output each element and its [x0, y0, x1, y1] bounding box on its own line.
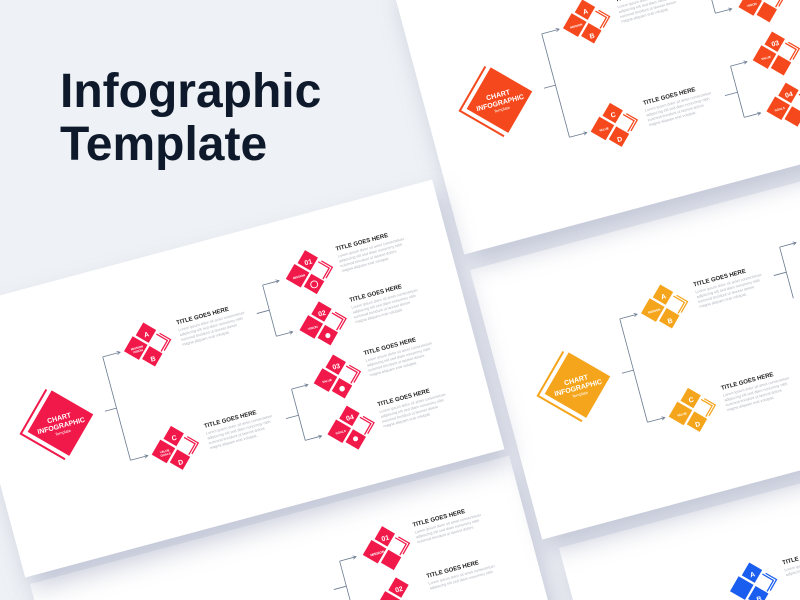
slide: main red: magna aliquam erat volutpat.: [182, 330, 230, 347]
cluster 01: MISSION: [292, 273, 306, 280]
slide: orange: Lorem ipsum dolor sit amet consectetuer: [645, 91, 713, 113]
slide: yellow: D: [695, 421, 701, 429]
slide: blue: A: [749, 571, 756, 579]
cluster 03: VALUE: [322, 378, 332, 384]
slide: orange: D: [617, 136, 623, 144]
cluster 01: 01: [381, 535, 390, 543]
slide: orange: euismod tincidunt ut laoreet dolore: [620, 0, 677, 19]
slide: main red: adipiscing elit sed diam nonummy nibh: [352, 294, 416, 315]
slide: orange: euismod tincidunt ut laoreet dolore: [647, 103, 704, 122]
cluster CD: D: [178, 459, 184, 467]
slide: yellow: euismod tincidunt ut laoreet dolore: [725, 388, 782, 407]
slide: yellow: B: [667, 318, 674, 326]
slide: main red: euismod tincidunt ut laoreet dolore: [354, 301, 411, 319]
slide: main red: euismod tincidunt ut laoreet dolore: [368, 354, 425, 373]
cluster AB: VISION: [132, 348, 143, 354]
cluster AB: B: [150, 356, 157, 364]
slide: bottom red: euismod tincidunt ut laoreet dolore: [417, 525, 474, 544]
slide: main red: euismod tincidunt ut laoreet dolore: [181, 323, 238, 342]
slide: main red: adipiscing elit sed diam nonummy nibh: [207, 420, 271, 441]
cluster 04: [321, 398, 381, 458]
slide: orange: Template: [493, 105, 511, 114]
chart diamond: CHART: [564, 374, 590, 387]
slide: orange: 03: [771, 40, 780, 49]
cluster 01: 01: [304, 259, 313, 267]
slide: bottom red: TITLE GOES HERE: [412, 509, 466, 529]
slide: orange: [392, 0, 800, 254]
slide: bottom red: Lorem ipsum dolor sit amet consectetuer: [414, 513, 482, 535]
slide: main red: TITLE GOES HERE: [176, 307, 230, 327]
slide: bottom red: [30, 456, 581, 600]
slide: main red: Lorem ipsum dolor sit amet consectetuer: [379, 392, 447, 414]
slide: orange: C: [610, 112, 617, 120]
cluster 03: 03: [332, 363, 341, 372]
slide: orange: VISION: [746, 2, 757, 8]
slide: main red: adipiscing elit sed diam nonummy nibh: [339, 243, 403, 263]
slide: yellow: magna aliquam erat volutpat.: [727, 396, 775, 412]
slide: orange: magna aliquam erat volutpat.: [649, 111, 697, 127]
slide: yellow: [470, 142, 800, 539]
slide: yellow: TITLE GOES HERE: [721, 372, 774, 392]
slide: main red: adipiscing elit sed diam nonummy nibh: [380, 398, 444, 419]
slide: orange: B: [589, 33, 596, 41]
slide: main red: magna aliquam erat volutpat.: [210, 434, 258, 450]
cluster 02: 02: [395, 586, 404, 594]
slide: main red: Lorem ipsum dolor sit amet consectetuer: [351, 288, 419, 310]
slide: main red: Lorem ipsum dolor sit amet consectetuer: [365, 341, 433, 363]
slide: orange: VALUE: [761, 55, 771, 61]
cluster 04: 04: [346, 414, 355, 423]
slide: main red: TITLE GOES HERE: [204, 410, 257, 430]
slide: yellow: euismod tincidunt ut laoreet dolore: [698, 285, 755, 304]
cluster 04: GOALS: [335, 429, 346, 435]
slide: yellow: adipiscing elit sed diam nonummy nibh: [724, 382, 788, 403]
slide: main red: magna aliquam erat volutpat.: [383, 412, 431, 429]
chart diamond: [528, 340, 620, 432]
chart diamond: CHART: [47, 412, 73, 425]
slide: orange: TITLE GOES HERE: [643, 87, 696, 107]
slide: orange: CHART: [486, 89, 512, 102]
slide: orange: GOALS: [774, 106, 785, 112]
slide: main red: euismod tincidunt ut laoreet dolore: [208, 426, 265, 445]
cluster 01: MISSION: [370, 550, 385, 557]
cluster CD: [145, 418, 205, 478]
slide: main red: [0, 180, 504, 577]
slide: main red: magna aliquam erat volutpat.: [369, 361, 417, 377]
slide: main red: euismod tincidunt ut laoreet dolore: [340, 249, 397, 268]
chart diamond: INFOGRAPHIC: [37, 417, 86, 436]
slide: main red: TITLE GOES HERE: [349, 284, 403, 304]
title: Infographic: [60, 65, 321, 118]
cluster 03: [307, 347, 367, 407]
slide: yellow: MISSION: [648, 307, 661, 315]
slide: orange: A: [582, 8, 589, 16]
slide: main red: euismod tincidunt ut laoreet dolore: [382, 405, 439, 424]
slide: main red: Lorem ipsum dolor sit amet consectetuer: [178, 311, 246, 332]
slide: main red: TITLE GOES HERE: [377, 389, 431, 408]
slide: main red: Lorem ipsum dolor sit amet consectetuer: [337, 237, 405, 259]
slide: orange: VALUE: [599, 126, 609, 133]
title: Template: [60, 118, 267, 171]
cluster AB: MISSION: [130, 344, 144, 351]
slide: orange: INFOGRAPHIC: [476, 94, 525, 113]
slide: orange: MISSION: [570, 22, 583, 30]
slide: main red: Lorem ipsum dolor sit amet consectetuer: [206, 414, 274, 436]
slide: yellow: adipiscing elit sed diam nonummy nibh: [696, 278, 760, 299]
slide: yellow: A: [660, 293, 667, 301]
cluster 02: [370, 570, 430, 600]
slide: main red: magna aliquam erat volutpat.: [355, 308, 403, 324]
slide: orange: magna aliquam erat volutpat.: [621, 7, 669, 24]
brackets: [84, 280, 322, 488]
cluster 01: [279, 243, 339, 302]
cluster CD: GOALS: [160, 451, 171, 458]
slide: yellow: magna aliquam erat volutpat.: [699, 292, 747, 309]
cluster CD: C: [171, 435, 178, 443]
slide: yellow: C: [688, 397, 695, 405]
slide: bottom red: adipiscing elit sed diam nonummy nibh: [416, 519, 480, 539]
slide: yellow: Lorem ipsum dolor sit amet consectetuer: [695, 273, 763, 294]
slide: blue: [559, 420, 800, 600]
cluster AB: A: [143, 331, 150, 339]
slide: main red: adipiscing elit sed diam nonummy nibh: [179, 316, 243, 337]
slide: yellow: Lorem ipsum dolor sit amet consectetuer: [723, 376, 791, 398]
cluster 02: [293, 294, 353, 354]
slide: orange: 04: [785, 91, 794, 100]
slide: yellow: VALUE: [677, 411, 687, 418]
slide: main red: magna aliquam erat volutpat.: [341, 257, 390, 273]
cluster AB: [118, 315, 177, 375]
cluster CD: VALUE: [159, 448, 170, 454]
cluster 02: VISION: [307, 325, 318, 331]
slide: bottom red: adipiscing elit sed diam nonummy nibh: [429, 570, 493, 591]
slide: orange: adipiscing elit sed diam nonummy nibh: [646, 97, 710, 118]
slide: bottom red: Lorem ipsum dolor sit amet consectetuer: [428, 564, 496, 586]
slide: yellow: TITLE GOES HERE: [693, 269, 747, 289]
chart diamond: Template: [54, 428, 72, 437]
chart diamond: [11, 378, 103, 470]
slide: main red: TITLE GOES HERE: [335, 233, 389, 253]
chart diamond: INFOGRAPHIC: [554, 379, 603, 398]
slide: main red: TITLE GOES HERE: [363, 337, 417, 357]
cluster 02: 02: [318, 310, 327, 318]
slide: bottom red: TITLE GOES HERE: [426, 560, 480, 580]
chart diamond: Template: [571, 390, 589, 399]
slide: main red: adipiscing elit sed diam nonummy nibh: [367, 347, 431, 368]
title: [60, 65, 321, 171]
cluster 01: [356, 519, 416, 578]
